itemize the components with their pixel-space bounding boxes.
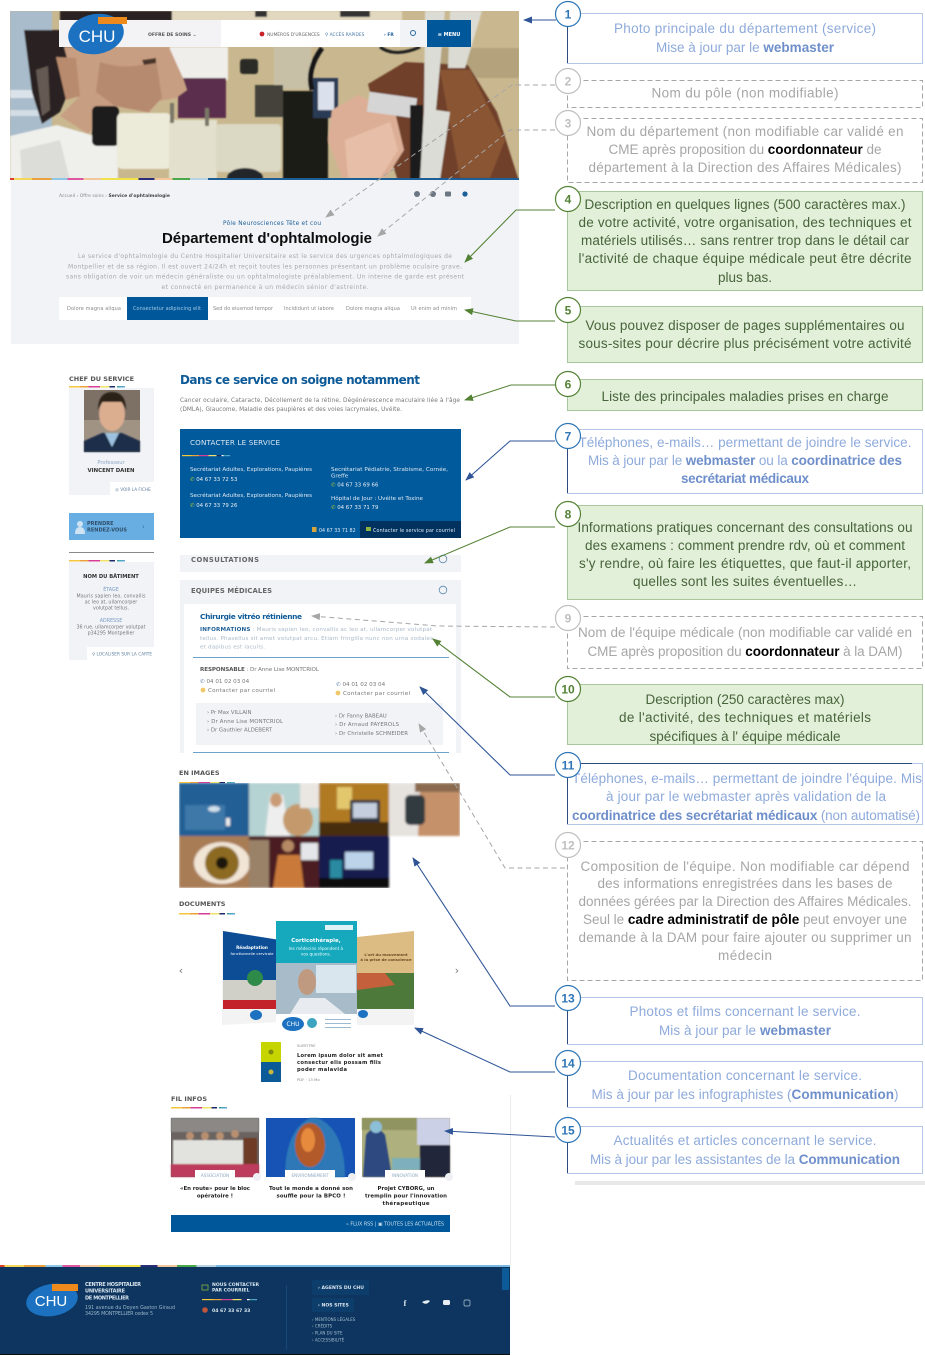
callout 5: Vous pouvez disposer de pages supplémentaires ou — [586, 318, 904, 333]
news card 1: opératoire ! — [197, 1192, 233, 1200]
callout 7: Téléphones, e-mails… permettant de joindre le service. — [578, 435, 912, 450]
site header bar: NUMÉROS D'URGENCES — [267, 30, 320, 38]
news card 2 — [266, 1118, 356, 1200]
callout 8: quelles sont les suites éventuelles… — [633, 574, 857, 589]
sub-page tabs: Incididunt ut labore — [284, 306, 334, 312]
panel: contacter le service: CONTACTER LE SERVICE — [190, 438, 280, 447]
arrow 3 — [378, 130, 555, 236]
team description: et dapibus est iaculis. — [200, 644, 265, 650]
document listing: poder malavida — [297, 1067, 347, 1073]
footer logo: CHU — [35, 1293, 67, 1310]
accordion: consultations: CONSULTATIONS — [191, 556, 259, 564]
panel: contacter le service: Hôpital de Jour : Uvéite et Toxine — [331, 495, 424, 502]
all news bar: ⌁ FLUX RSS | ▣ TOUTES LES ACTUALITÉS — [346, 1220, 444, 1228]
callout 3: CME après proposition du coordonnateur de — [608, 142, 882, 157]
callout 7 — [556, 424, 922, 494]
callout 10: spécifiques à l' équipe médicale — [650, 729, 840, 744]
callout 11: à jour par le webmaster après validation de la — [606, 789, 886, 804]
description paragraph: Montpellier et de sa région. Il est ouvert 24/24h et reçoit toutes les personnes présentant un problème oculaire grave, — [68, 264, 462, 270]
team contacts — [200, 667, 410, 697]
chef du service card: ◎ VOIR LA FICHE — [115, 487, 151, 492]
news card 1 — [171, 1118, 261, 1200]
footer links: › MENTIONS LÉGALES — [312, 1317, 356, 1322]
callout 9: 9 — [565, 612, 572, 626]
accordion: équipes médicales: EQUIPES MÉDICALES — [191, 586, 272, 595]
team members: › Dr Fanny BABEAU — [335, 714, 387, 720]
panel: contacter le service — [180, 429, 461, 538]
web page screenshot — [0, 9, 519, 1355]
news card 3: thérapeutique — [382, 1200, 430, 1207]
callout 15 — [556, 1118, 925, 1184]
team contacts: ✆ 04 01 02 03 04 — [200, 678, 250, 685]
team contacts: Contacter par courriel — [343, 691, 410, 697]
callout 9: Nom de l'équipe médicale (non modifiable car validé en — [578, 625, 912, 640]
footer contact — [202, 1282, 259, 1314]
hospital address — [85, 1282, 175, 1317]
callout 8: s'y rendre, où faire les étiquettes, que faut-il apporter, — [579, 556, 911, 571]
panel: maladies prises en charge: Cancer oculaire, Cataracte, Décollement de la rétine, Dégénérescence maculaire liée à l'âge — [180, 397, 460, 404]
footer contact: 04 67 33 67 33 — [212, 1308, 250, 1314]
panel: contacter le service: ✆ 04 67 33 72 53 — [190, 476, 237, 483]
callout 12: Seul le cadre administratif de pôle peut envoyer une — [583, 912, 907, 927]
gallery: en images — [179, 769, 460, 888]
callout 14: 14 — [561, 1056, 575, 1070]
news card 3: Projet CYBORG, un — [378, 1186, 435, 1192]
callout 2: Nom du pôle (non modifiable) — [652, 86, 838, 100]
arrow 1 — [524, 19, 556, 21]
brochure centre: CHU — [286, 1021, 300, 1028]
news card 2: ENVIRONNEMENT — [292, 1173, 329, 1178]
news card 2: souffle pour la BPCO ! — [276, 1194, 346, 1200]
chef du service card — [69, 375, 154, 497]
team contacts: ✆ 04 01 02 03 04 — [336, 681, 386, 688]
callout 9: CME après proposition du coordonnateur à la DAM) — [588, 644, 902, 659]
callout 12 — [556, 832, 922, 980]
callout 11: coordinatrice des secrétariat médicaux (non automatisé) — [572, 808, 920, 823]
CHU logo — [65, 9, 127, 59]
callout 12: Composition de l'équipe. Non modifiable car dépend — [580, 859, 910, 874]
site header bar: › FR — [384, 32, 394, 38]
hospital address: 191 avenue du Doyen Gaston Giraud — [85, 1305, 175, 1311]
site header bar — [59, 9, 471, 59]
callout 5 — [556, 298, 922, 362]
team description — [200, 627, 433, 650]
callout 14: Mis à jour par les infographistes (Communication) — [592, 1087, 898, 1102]
footer logo — [24, 1280, 80, 1320]
accordion: équipes médicales — [180, 580, 461, 753]
callout 1: 1 — [565, 8, 572, 22]
callout 12: des informations enregistrées dans les bases de — [598, 876, 892, 891]
callout 13: 13 — [561, 992, 575, 1006]
callout 5: 5 — [565, 304, 572, 318]
brochure right — [357, 931, 414, 1025]
arrow 14 — [415, 1028, 555, 1072]
all news bar — [171, 1215, 450, 1232]
building info card: volutpat tellus. — [93, 606, 129, 612]
callout 6 — [556, 372, 922, 410]
panel: maladies prises en charge — [180, 373, 460, 413]
panel: maladies prises en charge: Dans ce service on soigne notamment — [180, 373, 420, 387]
button: prendre rendez-vous: PRENDRE — [87, 521, 114, 527]
callout 10: 10 — [561, 682, 575, 696]
sub-page tabs: Dolore magna aliqua — [67, 306, 121, 312]
team name: Chirurgie vitréo rétinienne — [200, 612, 302, 621]
building info card: 36 rue, ullamcorper volutpat — [76, 624, 146, 630]
CHU logo: CHU — [79, 27, 115, 46]
colour strip under hero — [10, 178, 519, 180]
panel: contacter le service: ✆ 04 67 33 71 79 — [331, 504, 379, 511]
panel: hero photo of ophthalmology exam — [10, 11, 519, 188]
brochure left: fonctionnelle cervicale — [231, 951, 274, 956]
callout 3 — [556, 110, 922, 182]
callout 11 — [556, 752, 922, 824]
document listing: SUBTITRE — [297, 1043, 316, 1048]
building info card — [69, 552, 154, 660]
hospital address: DE MONTPELLIER — [85, 1296, 129, 1302]
callout 15: Actualités et articles concernant le service. — [614, 1133, 876, 1148]
callout 14: Documentation concernant le service. — [628, 1068, 862, 1083]
panel: maladies prises en charge: (DMLA), Glaucome, Maladie des paupières et des voies lacrymales, Uvéite. — [180, 406, 402, 413]
callout 7: secrétariat médicaux — [681, 471, 809, 486]
callout 4: Description en quelques lignes (500 caractères max.) — [584, 197, 906, 212]
callout 1 — [556, 2, 922, 64]
panel: contacter le service: Secrétariat Adultes, Explorations, Paupières — [190, 492, 312, 499]
callout 15: Mis à jour par les assistantes de la Communication — [590, 1152, 900, 1167]
callout 15: 15 — [561, 1124, 575, 1138]
callout 8: 8 — [565, 508, 572, 522]
document listing: Lorem ipsum dolor sit amet — [297, 1053, 384, 1059]
sub-page tabs: Consectetur adipiscing elit — [133, 306, 201, 312]
callout 13: Photos et films concernant le service. — [630, 1004, 860, 1019]
team members: › Dr Arnaud PAYEROLS — [335, 722, 400, 728]
team members: › Dr Gauthier ALDEBERT — [207, 728, 273, 734]
site header bar: ≡ MENU — [438, 32, 460, 38]
panel: contacter le service: ✆ 04 67 33 79 26 — [190, 502, 238, 509]
footer links: › NOS SITES — [318, 1302, 349, 1308]
building info card: ac leo at, ullamcorper — [85, 600, 137, 606]
callout 4: de votre activité, votre organisation, des techniques et — [578, 215, 912, 230]
callout 6: Liste des principales maladies prises en charge — [602, 389, 888, 404]
arrow 10 — [433, 639, 555, 697]
team description: INFORMATIONS : Mauris sapien leo, convallis ac leo at, ullamcorper volutpat — [200, 627, 433, 633]
footer links: › ACCESSIBILITÉ — [312, 1338, 345, 1342]
panel: contacter le service: Contacter le service par courriel — [373, 528, 455, 534]
hospital address: UNIVERSITAIRE — [85, 1288, 126, 1294]
documents carousel: ‹ — [179, 964, 183, 977]
news card 3 — [362, 1118, 453, 1207]
team contacts: Contacter par courriel — [208, 688, 275, 694]
footer links: › AGENTS DU CHU — [318, 1285, 364, 1291]
callout 4: 4 — [565, 192, 572, 206]
building info card: ÉTAGE — [103, 585, 119, 593]
panel: contacter le service: Secrétariat Pédiatrie, Strabisme, Cornée, — [331, 466, 448, 473]
sub-page tabs: Dolore magna aliqua — [346, 306, 400, 312]
brochure centre: les médecins répondent à — [289, 946, 344, 951]
callout 11: Téléphones, e-mails… permettant de joindre l'équipe. Mis — [572, 771, 922, 786]
brochure left — [222, 931, 280, 1025]
document listing: consectur elis possam filis — [297, 1060, 381, 1066]
arrow 6 — [465, 385, 555, 400]
description paragraph: sans obligation de voir un médecin généraliste ou un ophtalmologiste préalablement. Un interne de garde est présent — [66, 274, 465, 280]
chef du service card: Professeur — [97, 460, 125, 466]
news feed: fil infos — [171, 1095, 511, 1265]
brochure centre: Corticothérapie, — [291, 937, 341, 944]
callout 9 — [556, 606, 922, 668]
brochure centre: vos questions. — [301, 952, 331, 956]
brochure right: L'art du mouvement — [364, 952, 408, 957]
news card 3: INNOVATION — [392, 1173, 418, 1178]
news feed: fil infos: FIL INFOS — [171, 1095, 207, 1103]
callout 7: Mis à jour par le webmaster ou la coordinatrice des — [588, 453, 902, 468]
callout 1: Photo principale du département (service) — [614, 21, 876, 36]
callout 8: Informations pratiques concernant des consultations ou — [578, 520, 912, 535]
callout 8 — [556, 502, 922, 600]
sub-page tabs — [59, 297, 471, 320]
button: prendre rendez-vous — [69, 513, 154, 540]
documents carousel: › — [455, 964, 459, 977]
panel: contacter le service: Greffe — [331, 474, 349, 480]
arrow 9 — [312, 616, 555, 627]
building info card: ADRESSE — [100, 618, 122, 624]
news card 2: Tout le monde a donné son — [269, 1185, 353, 1192]
building info card: NOM DU BÂTIMENT — [83, 573, 139, 580]
building info card: p34295 Montpellier — [88, 630, 134, 636]
callout 13 — [556, 986, 922, 1044]
description paragraph: Le service d'ophtalmologie du Centre Hospitalier Universitaire est le service des urgences ophtalmologiques de — [78, 253, 452, 260]
chef du service card: CHEF DU SERVICE — [69, 375, 134, 383]
callout 14 — [556, 1050, 922, 1108]
callout 2: 2 — [565, 74, 572, 88]
footer links: › PLAN DU SITE — [312, 1330, 343, 1336]
sub-page tabs: Sed do eiusmod tempor — [213, 306, 274, 312]
team members: › Pr Max VILLAIN — [207, 710, 252, 716]
panel: department header — [11, 180, 519, 344]
site header bar: OFFRE DE SOINS ⌄ — [148, 32, 197, 38]
panel: contacter le service: 04 67 33 71 82 — [319, 528, 356, 534]
hospital address: 34295 MONTPELLIER cedex 5 — [85, 1311, 153, 1317]
panel: left sidebar — [69, 375, 154, 660]
social icons — [404, 1299, 470, 1308]
button: prendre rendez-vous: › — [142, 523, 145, 531]
arrow 13 — [413, 858, 555, 1006]
callout 5: sous-sites pour décrire plus précisément votre activité — [578, 336, 912, 351]
department title: Département d'ophtalmologie — [162, 230, 372, 247]
site header bar: ⚲ ACCÈS RAPIDES — [325, 30, 365, 38]
footer contact: PAR COURRIEL — [212, 1288, 250, 1294]
description paragraph: et connecté en permanence à un médecin sénior d'astreinte. — [162, 284, 369, 291]
callout 6: 6 — [565, 378, 572, 392]
callout 12: médecin — [718, 948, 772, 963]
arrow 15 — [445, 1131, 555, 1137]
description paragraph — [66, 253, 465, 291]
callout 4: l'activité de chaque équipe médicale peut être décrite — [578, 251, 912, 266]
social icons: f — [404, 1299, 407, 1308]
arrow 2 — [326, 85, 555, 217]
documents carousel: DOCUMENTS — [179, 900, 226, 908]
panel: contacter le service: ✆ 04 67 33 69 66 — [331, 482, 379, 488]
footer — [0, 1265, 510, 1355]
accordion: consultations — [180, 555, 461, 572]
documents carousel — [179, 900, 459, 1082]
callout 1: Mise à jour par le webmaster — [656, 40, 835, 55]
chef du service card: VINCENT DAIEN — [88, 468, 135, 474]
callout 12: données gérées par la Direction des Affaires Médicales. — [578, 894, 912, 909]
footer links: › CRÉDITS — [312, 1324, 333, 1328]
portrait — [84, 390, 140, 452]
callout 4: matériels utilisés… sans rentrer trop dans le détail car — [581, 233, 910, 248]
callout 3: 3 — [565, 116, 572, 130]
arrow 12 — [419, 724, 565, 868]
callout 10: Description (250 caractères max) — [646, 692, 844, 707]
pole name: Pôle Neurosciences Tête et cou — [223, 220, 321, 227]
footer links — [312, 1280, 369, 1342]
building info card: Mauris sapien leo, convallis — [76, 594, 146, 600]
callout 8: des examens : comment prendre rdv, où et comment — [585, 538, 905, 553]
callout 3: département à la Direction des Affaires Médicales) — [588, 160, 902, 175]
callout 4 — [556, 186, 922, 290]
news card 1: «En route» pour le bloc — [180, 1186, 250, 1192]
callout 12: 12 — [561, 838, 575, 852]
team members: › Dr Christelle SCHNEIDER — [335, 731, 408, 737]
callout 7: 7 — [565, 430, 572, 444]
callout 4: plus bas. — [718, 270, 772, 285]
footer contact: NOUS CONTACTER — [212, 1282, 259, 1288]
brochure left: Réadaptation — [236, 945, 268, 950]
team members — [196, 703, 443, 745]
callout 11: 11 — [562, 758, 575, 772]
breadcrumb: Accueil › Offre soins › Service d'ophtalmologie — [59, 193, 170, 199]
team description: tellus. Phasellus sit amet volutpat arcu. Etiam fringilla nunc non urna sodales — [200, 636, 433, 642]
arrow 4 — [465, 210, 555, 262]
team members: › Dr Anne Lise MONTCRIOL — [207, 719, 283, 725]
button: prendre rendez-vous: RENDEZ-VOUS — [87, 528, 127, 534]
document listing — [261, 1042, 384, 1082]
arrow 7 — [466, 441, 555, 480]
document listing: PDF · 13 Mo — [297, 1077, 320, 1082]
brochure centre — [276, 921, 357, 1034]
hospital address: CENTRE HOSPITALIER — [85, 1282, 141, 1288]
callout 10: de l'activité, des techniques et matériels — [619, 710, 871, 725]
callout 2 — [556, 68, 922, 108]
team contacts: RESPONSABLE : Dr Anne Lise MONTCRIOL — [200, 667, 320, 673]
sub-page tabs: Ut enim ad minim — [411, 306, 457, 312]
callout 13: Mis à jour par le webmaster — [659, 1023, 832, 1038]
arrow 8 — [425, 527, 555, 563]
panel: contacter le service: Secrétariat Adultes, Explorations, Paupières — [190, 466, 312, 473]
building info card: ⚲ LOCALISER SUR LA CARTE — [92, 652, 152, 656]
brochure right: à la prise de conscience — [360, 957, 412, 962]
callout 10 — [556, 676, 922, 744]
share icons — [414, 191, 468, 197]
news card 1: ASSOCIATION — [201, 1173, 229, 1178]
arrow 11 — [420, 687, 555, 775]
arrow 5 — [465, 310, 555, 321]
news card 3: tremplin pour l'innovation — [365, 1194, 447, 1200]
callout 3: Nom du département (non modifiable car validé en — [586, 124, 904, 139]
gallery: en images: EN IMAGES — [179, 769, 220, 777]
callout 12: demande à la DAM pour faire ajouter ou supprimer un — [578, 930, 912, 945]
